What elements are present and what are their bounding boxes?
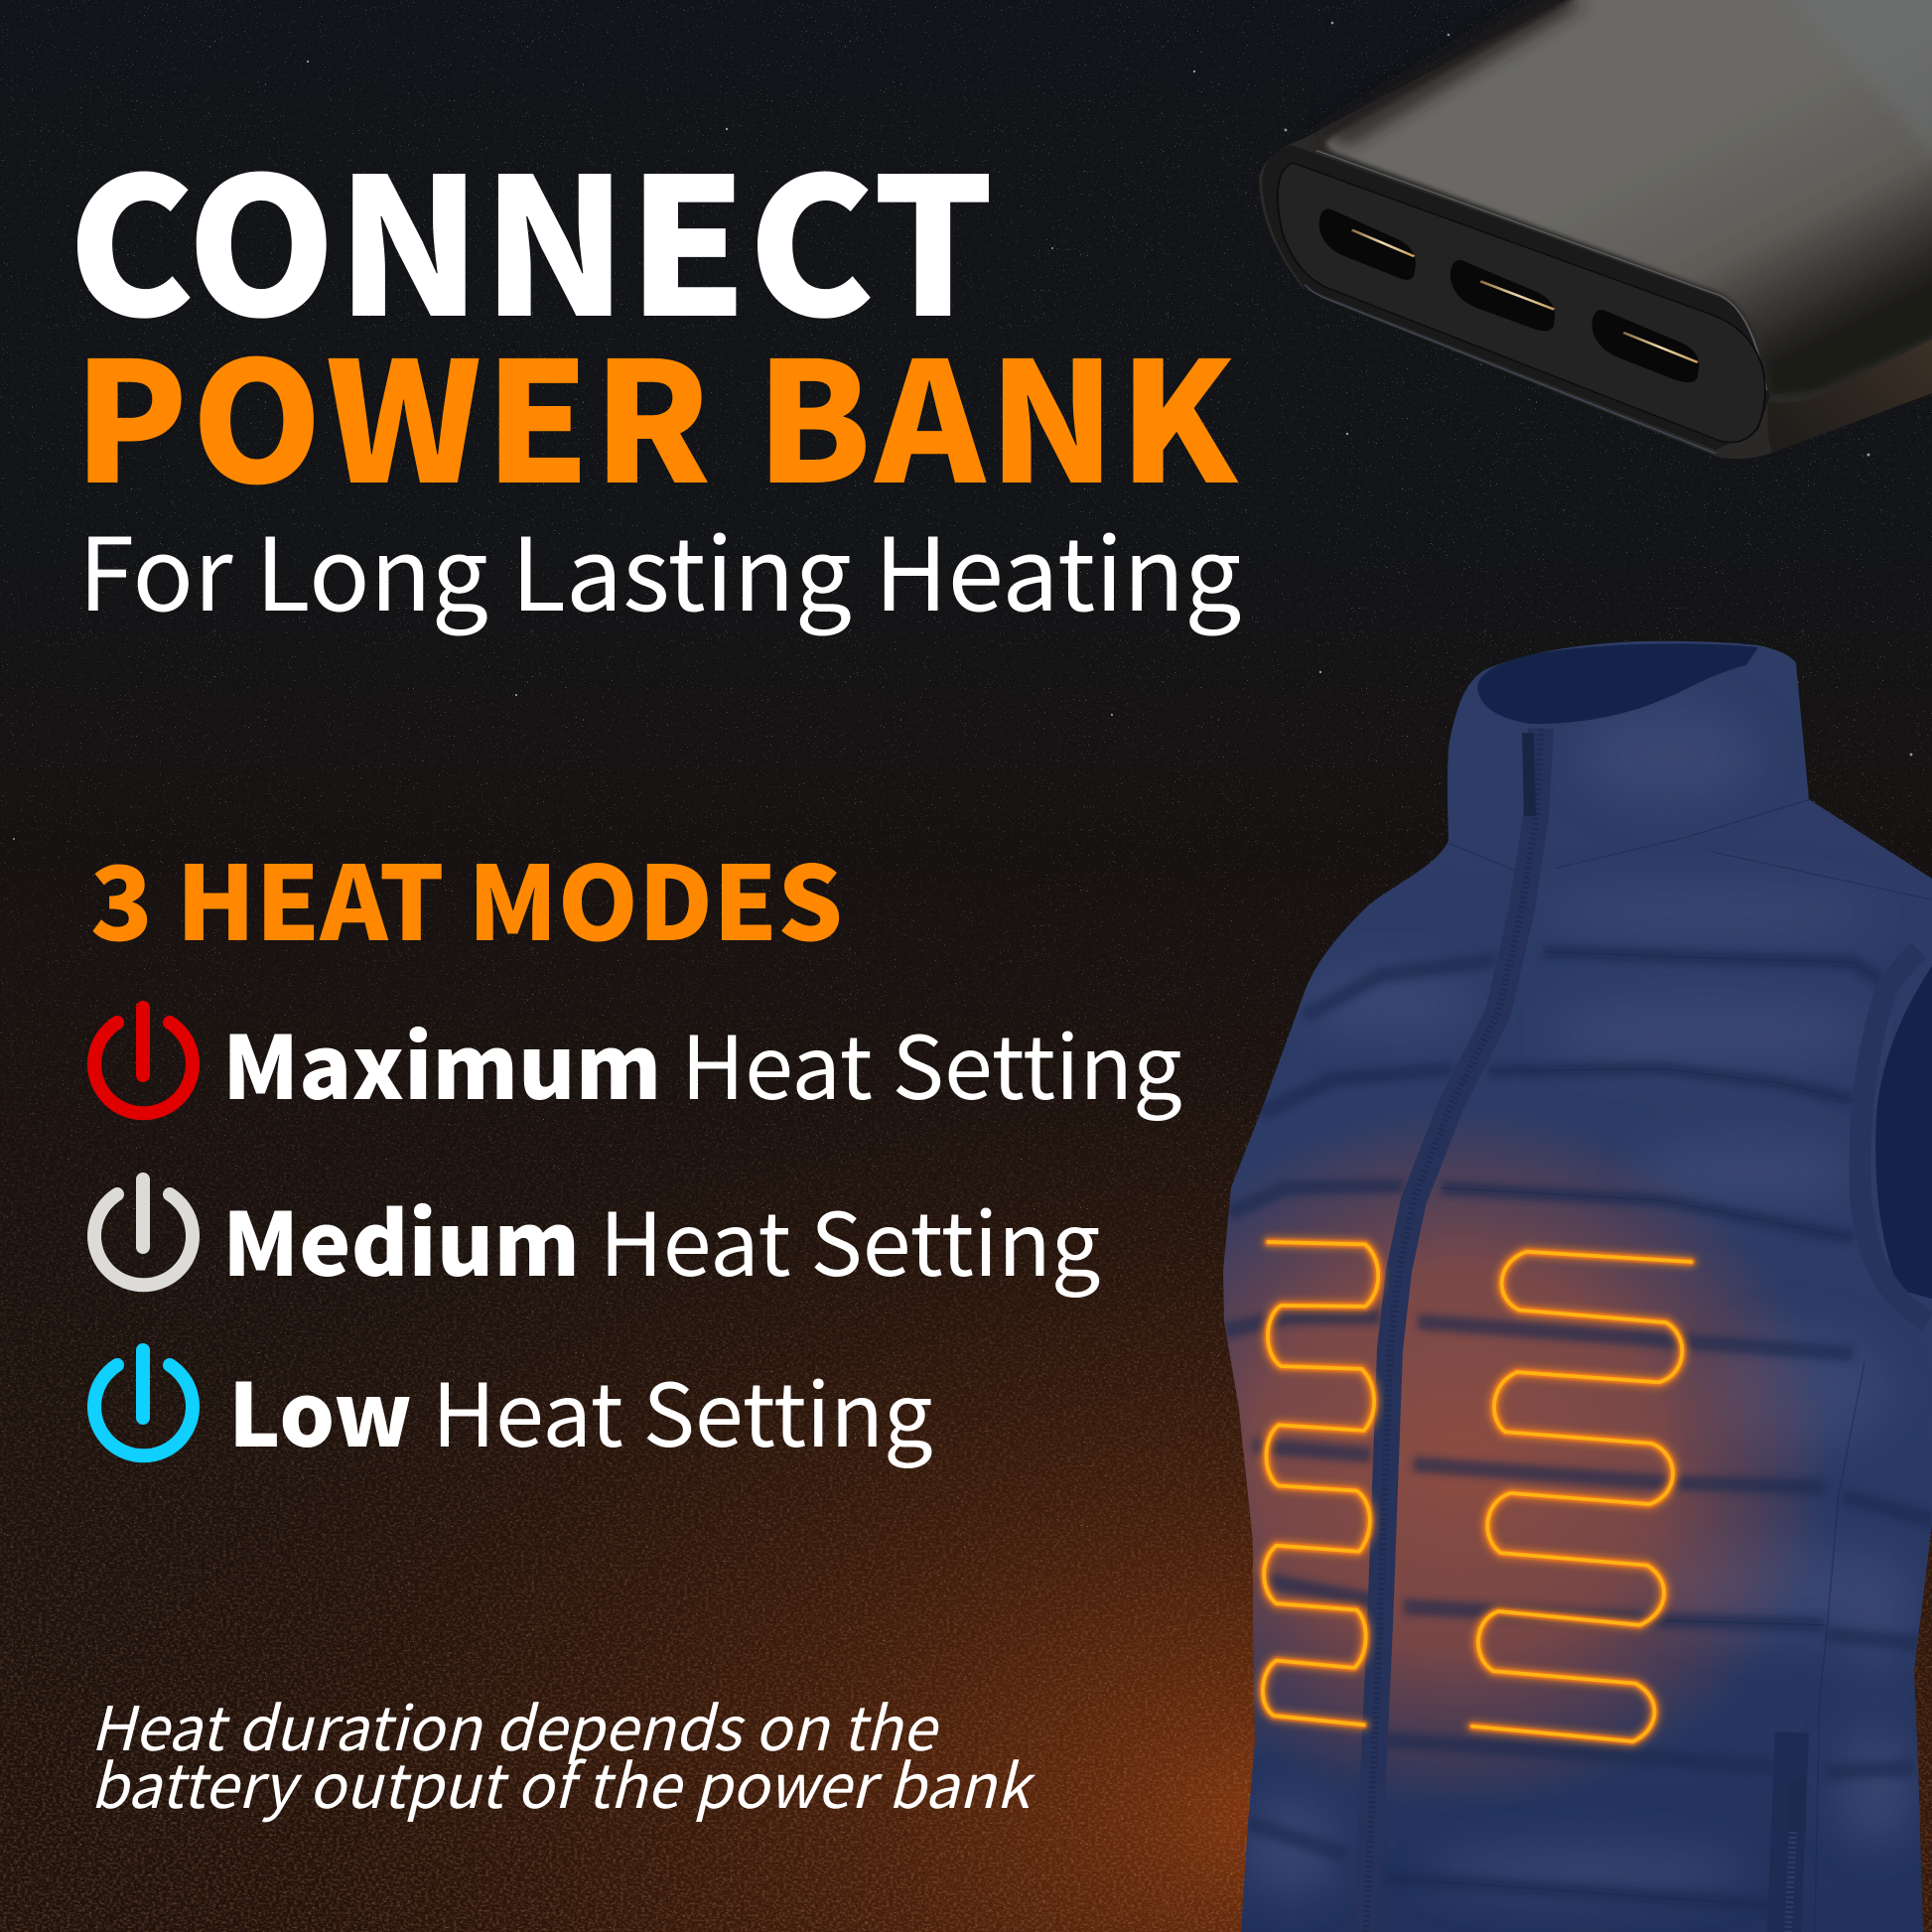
port 2 xyxy=(1450,260,1555,332)
icon: red power symbol xyxy=(94,1008,193,1113)
collar interior xyxy=(1477,643,1758,724)
right coil xyxy=(1472,1252,1691,1741)
vest base fabric xyxy=(1211,635,1932,1932)
image: power bank with three USB-C ports xyxy=(1259,0,1932,459)
footnote: Heat duration depends on the xyxy=(90,1680,941,1768)
label: maximum heat setting: Maximum Heat Setting xyxy=(222,999,1182,1125)
power bank front rim xyxy=(1262,146,1770,450)
power bank rim highlight xyxy=(1316,151,1766,390)
coil orange halo xyxy=(1263,1242,1691,1741)
title: Power Bank: POWER BANK xyxy=(73,290,1239,531)
heating coils xyxy=(1263,1242,1691,1741)
icon: grey power symbol xyxy=(94,1179,193,1285)
pocket zipper xyxy=(1784,1732,1806,1932)
label: low heat setting: Low Heat Setting xyxy=(228,1346,933,1472)
zipper pull xyxy=(1522,733,1536,816)
power bank shell xyxy=(1259,0,1932,459)
mode row: medium xyxy=(94,1175,1100,1302)
coil glow xyxy=(1263,1242,1691,1741)
front zipper xyxy=(1366,729,1541,1932)
power bank dark left edge xyxy=(1333,0,1570,139)
port 3 xyxy=(1591,310,1699,382)
heading: 3 heat modes: 3 HEAT MODES xyxy=(90,821,843,970)
port 1 xyxy=(1318,208,1416,280)
image: heated vest xyxy=(1223,641,1932,1932)
power bank lower side xyxy=(1767,338,1932,453)
power bank front face xyxy=(1278,163,1765,443)
subtitle: For Long Lasting Heating xyxy=(78,494,1241,640)
armhole binding xyxy=(1860,950,1928,1321)
icon: blue power symbol xyxy=(94,1350,193,1455)
left coil xyxy=(1263,1242,1378,1725)
power bank top surface xyxy=(1326,0,1932,394)
quilting seams (upper) xyxy=(1229,799,1932,1238)
mode row: low xyxy=(94,1346,933,1472)
quilting seams (lower) xyxy=(1224,1317,1932,1932)
label: medium heat setting: Medium Heat Setting xyxy=(222,1175,1100,1302)
puff highlights xyxy=(1241,705,1916,1896)
armhole interior xyxy=(1875,966,1932,1299)
title: Connect: CONNECT xyxy=(68,95,995,371)
footnote xyxy=(90,1680,1036,1826)
power bank blue-grey highlight xyxy=(1782,0,1932,166)
heat glow on vest xyxy=(1223,1125,1813,1795)
footnote: battery output of the power bank xyxy=(90,1737,1036,1826)
lower rim highlight xyxy=(1305,285,1716,454)
mode row: maximum xyxy=(94,999,1182,1125)
